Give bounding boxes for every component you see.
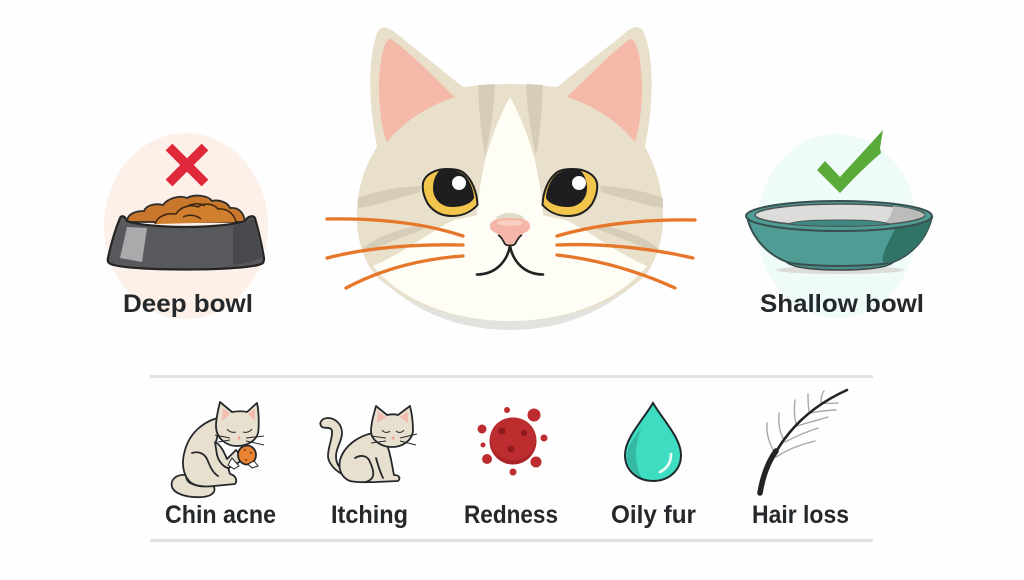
forehead stripes bbox=[478, 84, 543, 156]
panel: shallow bowl bbox=[746, 130, 932, 318]
left eye bbox=[423, 169, 478, 216]
left ear inner bbox=[379, 39, 455, 142]
ears and face detail bbox=[371, 411, 417, 445]
head and ears bbox=[357, 27, 663, 321]
symptom: redness bbox=[464, 407, 558, 529]
icon: deep food bowl bbox=[108, 196, 264, 270]
panel: cat face bbox=[327, 27, 695, 330]
icon: sitting cat bbox=[320, 406, 413, 482]
icon: thinning hair strand bbox=[760, 390, 847, 493]
icon: oil drop bbox=[625, 403, 681, 481]
right ear inner bbox=[567, 39, 642, 142]
right eye bbox=[542, 169, 597, 216]
label: Oily fur: Oily fur bbox=[611, 501, 696, 529]
symptom: itching bbox=[320, 406, 417, 529]
label: Deep bowl: Deep bowl bbox=[123, 290, 253, 318]
white blaze and muzzle bbox=[373, 97, 647, 321]
mouth bbox=[477, 246, 543, 274]
chin shadow bbox=[375, 272, 646, 330]
symptom: chin acne bbox=[165, 402, 276, 529]
label: Chin acne: Chin acne bbox=[165, 501, 276, 529]
background circle: deep bowl bbox=[104, 133, 268, 319]
symptom: hair loss bbox=[752, 390, 849, 529]
cheek stripes bbox=[358, 186, 663, 252]
icon: red spots bbox=[478, 407, 548, 476]
icon: red cross bbox=[169, 147, 205, 183]
icon: green check mark bbox=[817, 130, 883, 193]
icon: cat scratching chin bbox=[172, 402, 259, 497]
panel: deep bowl bbox=[104, 133, 268, 319]
nose bbox=[490, 213, 530, 246]
background circle: shallow bowl bbox=[757, 134, 917, 318]
ears and face detail bbox=[215, 408, 264, 469]
symptom: oily fur bbox=[611, 403, 696, 529]
label: Itching: Itching bbox=[331, 501, 408, 529]
label: Shallow bowl: Shallow bowl bbox=[760, 290, 924, 318]
whiskers bbox=[327, 219, 695, 288]
icon: shallow teal bowl bbox=[746, 201, 932, 274]
label: Redness: Redness bbox=[464, 501, 558, 529]
label: Hair loss: Hair loss bbox=[752, 501, 849, 529]
